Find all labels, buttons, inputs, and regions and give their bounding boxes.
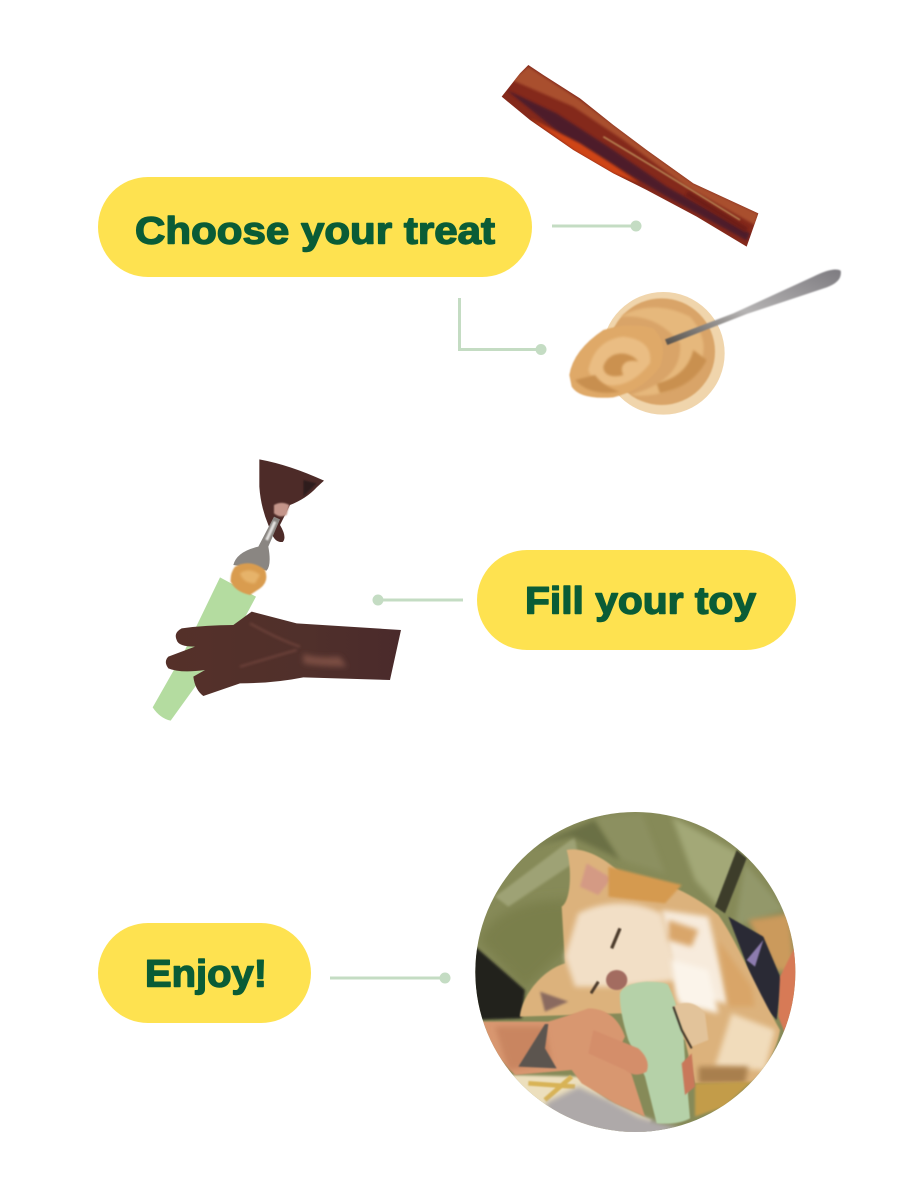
spoon [665,270,841,345]
lower hand [166,612,401,696]
paw [673,1003,708,1047]
arrow: enjoy to photo [330,972,450,984]
pill: choose your treat [98,177,532,277]
pill: enjoy [98,923,311,1023]
harness [728,917,782,1020]
toy [153,577,256,721]
dog body base [520,849,780,1083]
photo: dog chewing toy [475,812,796,1132]
heading: choose your treat: Choose your treat [135,210,495,252]
blanket [512,1074,652,1132]
peanut butter [231,563,266,595]
jacket shades [478,902,564,984]
jar [602,292,725,415]
dog face pale [565,903,678,987]
spoon [233,517,280,571]
eye and nose [612,928,620,948]
heading: enjoy: Enjoy! [145,954,267,996]
arm and hand [482,1008,645,1117]
arm right [778,948,796,1032]
icon: bully stick treat [502,65,758,247]
upper hand [259,459,324,542]
icon: peanut butter jar with spoon [569,270,841,415]
icon: hand with spoon filling toy [153,459,401,721]
thumb and finger [588,1030,648,1075]
dark lower left [472,943,525,1020]
arrow: choose to bully stick [552,220,642,232]
dollop [569,325,663,398]
tattoo [518,1024,557,1068]
arrow: toy to fill [372,594,463,606]
arrow: choose to peanut butter [460,298,546,355]
pill: fill your toy [477,550,796,650]
warm back [748,913,795,973]
toy [620,982,690,1124]
heading: fill your toy: Fill your toy [525,580,756,622]
